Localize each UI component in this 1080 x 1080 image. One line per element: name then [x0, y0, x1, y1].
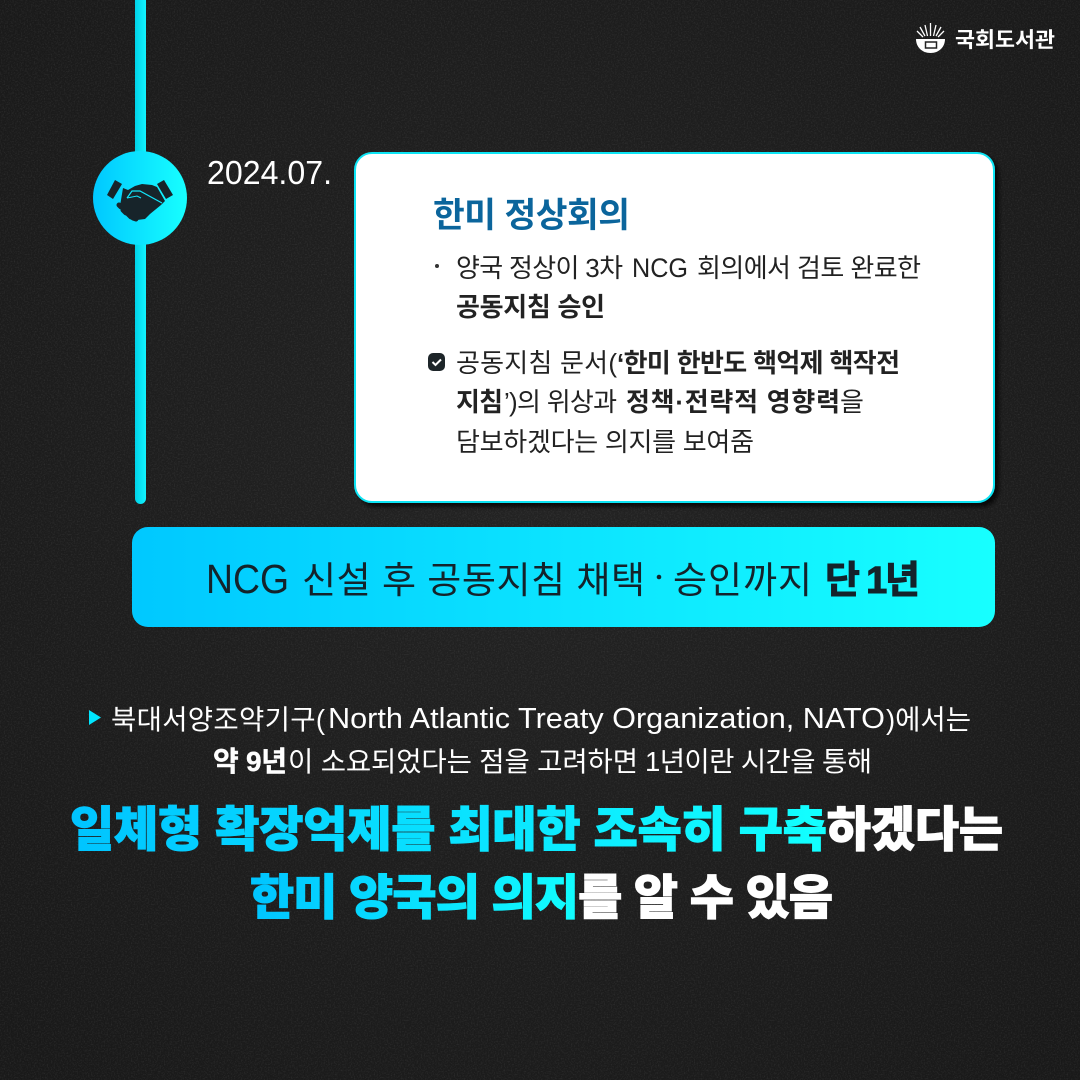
check text: ‘한미 한반도 핵억제 핵작전 [617, 348, 900, 378]
banner text: 신설 후 공동지침 채택 [302, 560, 645, 601]
icon: triangle marker [89, 710, 101, 725]
card heading: 한미 정상회의 [433, 197, 630, 235]
timeline node [93, 151, 187, 245]
bullet text: 공동지침 승인 [456, 292, 605, 322]
banner background [132, 527, 995, 627]
banner text [206, 556, 920, 602]
NATO text: 북대서양조약기구( [111, 704, 325, 735]
NATO text [111, 703, 971, 777]
card background [355, 153, 994, 502]
check text: 지침 [456, 387, 503, 417]
NATO text: 1년이란 시간을 통해 [645, 746, 872, 777]
banner text: NCG [206, 556, 289, 602]
bullet text [435, 253, 921, 322]
banner text: 승인까지 [673, 560, 812, 601]
check text: 공동지침 문서( [456, 348, 617, 378]
icon: logo emblem [916, 23, 945, 53]
conclusion headline: 일체형 확장억제를 최대한 조속히 구축하겠다는 [70, 804, 1003, 857]
conclusion headline [70, 804, 1003, 925]
bullet text: 양국 정상이 3차 [456, 253, 623, 283]
check text [456, 348, 900, 457]
NATO text: )에서는 [886, 704, 971, 735]
check text: 정책·전략적 영향력 [626, 387, 840, 417]
banner text: 단 1년 [825, 560, 920, 602]
bullet text: 회의에서 검토 완료한 [697, 253, 921, 283]
banner: one year [132, 527, 995, 627]
NATO text: 약 9년 [213, 746, 287, 777]
NATO text: 이 소요되었다는 점을 고려하면 [288, 746, 638, 777]
timeline line [135, 0, 146, 504]
logo: National Assembly Library [916, 23, 1055, 53]
panel: summit card [355, 153, 994, 502]
conclusion headline: 한미 양국의 의지를 알 수 있음 [250, 872, 833, 925]
NATO text: North Atlantic Treaty Organization, NATO [328, 703, 885, 735]
date label: 2024.07. [207, 154, 332, 191]
check text: 담보하겠다는 의지를 보여줌 [456, 427, 754, 457]
check text: ’)의 위상과 [504, 387, 617, 417]
icon: check box [428, 353, 445, 371]
icon: handshake [107, 180, 173, 220]
node circle [93, 151, 187, 245]
check text: 을 [840, 387, 864, 417]
logo text: 국회도서관 [955, 29, 1055, 52]
bullet text: NCG [632, 253, 688, 283]
